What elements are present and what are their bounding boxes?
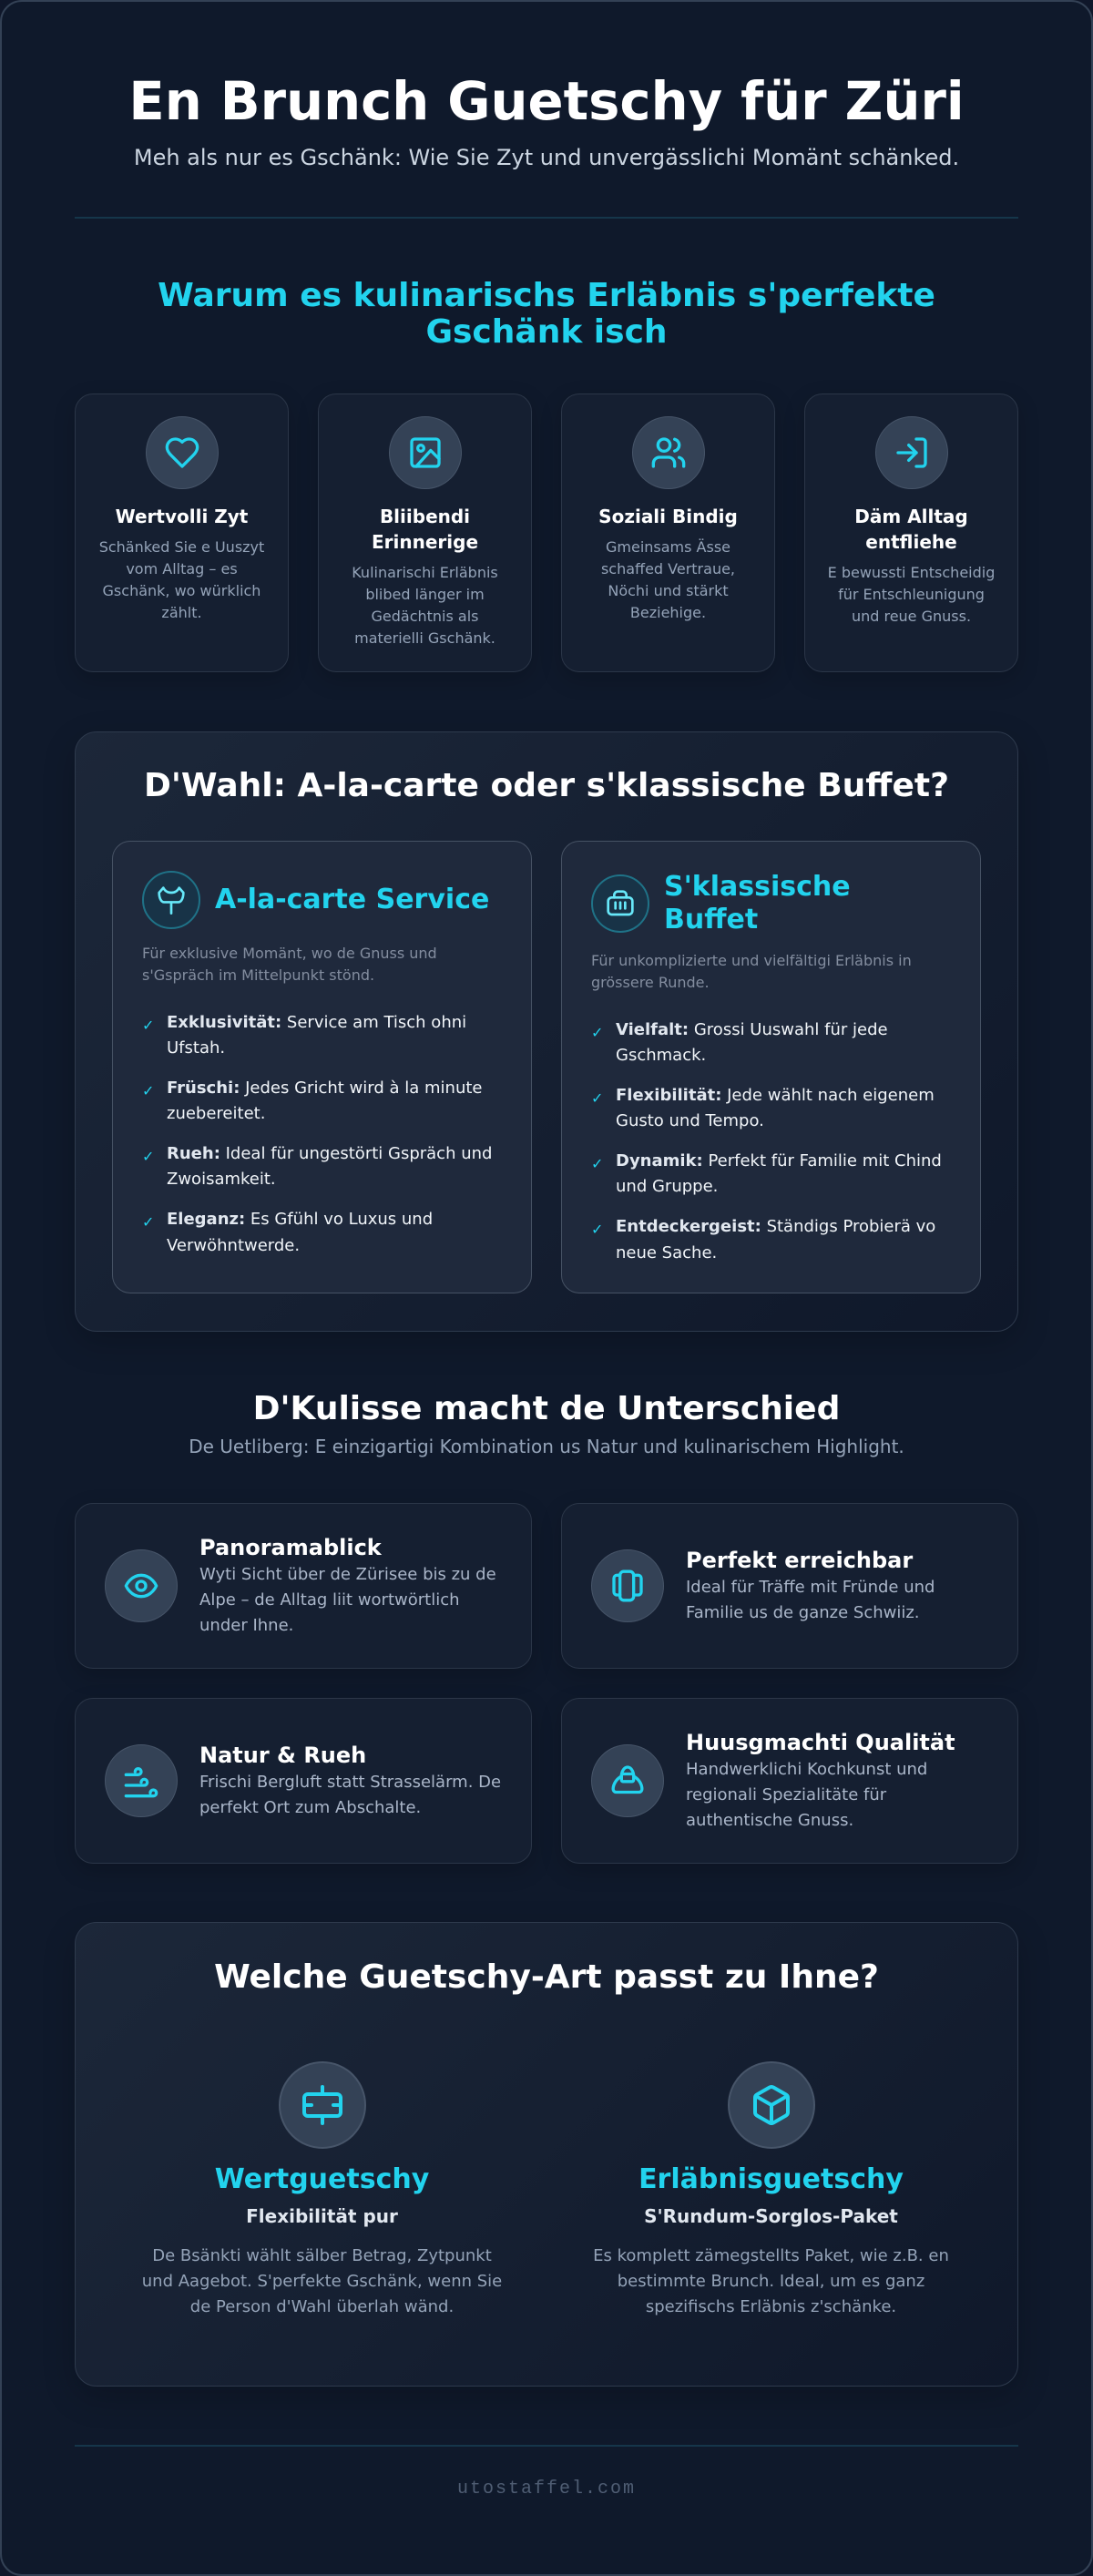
icon: image: [388, 416, 461, 489]
panel: Panoramablick: [75, 1503, 532, 1669]
option benefits list: ✓: [142, 1213, 154, 1231]
card text: E bewussti Entscheidig: [828, 564, 995, 581]
option benefits list: Flexibilität: Jede wählt nach eigenem: [616, 1086, 935, 1105]
heading: choice: D'Wahl: A-la-carte oder s'klassische Buffet?: [144, 767, 949, 804]
card text: vom Alltag – es: [126, 560, 238, 578]
panel: Erläbnisguetschy: [593, 2061, 949, 2316]
voucher text: Es komplett zämegstellts Paket, wie z.B. en: [593, 2246, 949, 2265]
section heading: why: Warum es kulinarischs Erläbnis s'perfekte: [158, 277, 935, 314]
icon: wind: [105, 1744, 178, 1817]
option benefits list: Eleganz: Es Gfühl vo Luxus und: [167, 1210, 433, 1229]
card heading: [372, 506, 478, 553]
option benefits list: Zwoisamkeit.: [167, 1170, 276, 1189]
feature text: Natur & Rueh: [199, 1743, 366, 1768]
feature text: Ideal für Träffe mit Fründe und: [686, 1578, 935, 1597]
option benefits list: ✓: [591, 1024, 603, 1040]
panel: Perfekt erreichbar: [561, 1503, 1018, 1669]
card text: materielli Gschänk.: [354, 629, 495, 647]
option description: [142, 945, 437, 984]
card text: Beziehige.: [630, 604, 706, 621]
option benefits list: neue Sache.: [616, 1243, 717, 1262]
voucher text: De Bsänkti wählt sälber Betrag, Zytpunkt: [152, 2246, 492, 2265]
option header: [591, 871, 851, 935]
voucher tagline: S'Rundum-Sorglos-Paket: [644, 2205, 898, 2227]
feature text: Perfekt erreichbar: [686, 1548, 913, 1573]
card text: Gmeinsams Ässe: [606, 538, 730, 556]
panel: Wertguetschy: [142, 2061, 502, 2316]
icon: log in arrow: [874, 416, 947, 489]
feature text: Wyti Sicht über de Zürisee bis zu de: [199, 1565, 496, 1584]
panel: Wertvolli Zyt: [75, 394, 289, 672]
option benefits list: und Gruppe.: [616, 1177, 718, 1196]
voucher name: Wertguetschy: [215, 2163, 429, 2195]
option description: grössere Runde.: [591, 974, 710, 991]
panel: Soziali Bindig: [561, 394, 775, 672]
option benefits list: zuebereitet.: [167, 1104, 265, 1123]
option benefits list: ✓: [591, 1089, 603, 1107]
option header: [142, 871, 489, 929]
option benefits list: Verwöhntwerde.: [167, 1236, 300, 1255]
voucher text: spezifischs Erläbnis z'schänke.: [646, 2297, 896, 2316]
feature text: authentische Gnuss.: [686, 1811, 853, 1830]
option benefits list: Gusto und Tempo.: [616, 1111, 764, 1130]
card heading: entfliehe: [865, 531, 957, 553]
card text: [601, 538, 735, 621]
card text: Kulinarischi Erläbnis: [352, 564, 498, 581]
panel: A-la-carte Service: [112, 841, 532, 1293]
feature text: [199, 1535, 496, 1635]
option benefits list: Ufstah.: [167, 1038, 225, 1058]
voucher tagline: Flexibilität pur: [246, 2205, 398, 2227]
panel: Däm Alltag entfliehe: [804, 394, 1018, 672]
voucher text: bestimmte Brunch. Ideal, um es ganz: [618, 2272, 924, 2291]
card text: zählt.: [161, 604, 202, 621]
panel: S'klassische Buffet: [561, 841, 981, 1293]
option benefits list: Exklusivität: Service am Tisch ohni: [167, 1013, 466, 1031]
feature text: perfekt Ort zum Abschalte.: [199, 1798, 421, 1817]
icon: box: [727, 2061, 814, 2149]
card text: und reue Gnuss.: [852, 608, 971, 625]
feature text: under Ihne.: [199, 1616, 293, 1635]
card heading: Soziali Bindig: [598, 506, 738, 527]
section heading: why: [158, 277, 935, 351]
voucher text: de Person d'Wahl überlah wänd.: [190, 2297, 454, 2316]
panel: voucher types background: [75, 1922, 1018, 2387]
card heading: Bliibendi: [380, 506, 470, 527]
voucher name: Erläbnisguetschy: [638, 2163, 904, 2195]
icon: a-la-carte: [142, 871, 200, 929]
feature text: [199, 1743, 501, 1817]
voucher text: [593, 2246, 949, 2316]
option heading: Buffet: [664, 904, 758, 935]
panel: Natur & Rueh: [75, 1698, 532, 1864]
feature text: Familie us de ganze Schwiiz.: [686, 1603, 920, 1622]
card text: [352, 564, 498, 647]
card text: Gedächtnis als: [371, 608, 479, 625]
footer: utostaffel.com: [457, 2479, 636, 2499]
icon: buffet: [591, 874, 649, 933]
option heading: A-la-carte Service: [215, 884, 489, 915]
card text: für Entschleunigung: [838, 586, 985, 603]
option benefits list: Rueh: Ideal für ungestörti Gspräch und: [167, 1144, 492, 1163]
option benefits list: ✓: [142, 1148, 154, 1165]
subtitle: Meh als nur es Gschänk: Wie Sie Zyt und unvergässlichi Momänt schänked.: [134, 145, 959, 170]
card heading: Wertvolli Zyt: [116, 506, 248, 527]
feature text: Handwerklichi Kochkunst und: [686, 1760, 927, 1779]
option benefits list: Früschi: Jedes Gricht wird à la minute: [167, 1078, 483, 1098]
icon: eye: [105, 1549, 178, 1622]
icon: users: [632, 416, 705, 489]
option benefits list: Vielfalt: Grossi Uuswahl für jede: [616, 1020, 888, 1038]
option heading: S'klassische: [664, 871, 851, 903]
heading: setting: D'Kulisse macht de Unterschied: [253, 1390, 840, 1427]
option benefits list: [142, 1013, 492, 1255]
card heading: [854, 506, 968, 553]
option description: Für unkomplizierte und vielfältigi Erläbnis in: [591, 952, 912, 969]
panel: choice background: [75, 731, 1018, 1332]
feature text: Huusgmachti Qualität: [686, 1730, 955, 1755]
option description: s'Gspräch im Mittelpunkt stönd.: [142, 966, 374, 984]
option heading: [664, 871, 851, 935]
card heading: Däm Alltag: [854, 506, 968, 527]
icon: connected panels: [591, 1549, 664, 1622]
subheading: setting: De Uetliberg: E einzigartigi Kombination us Natur und kulinarischem Highlight.: [189, 1436, 904, 1457]
option benefits list: [591, 1020, 942, 1262]
option benefits list: ✓: [142, 1017, 154, 1033]
option benefits list: ✓: [591, 1221, 603, 1238]
card text: [99, 538, 264, 621]
icon: bag: [591, 1744, 664, 1817]
feature text: Panoramablick: [199, 1535, 382, 1560]
voucher text: und Aagebot. S'perfekte Gschänk, wenn Sie: [142, 2272, 502, 2291]
feature text: Frischi Bergluft statt Strasselärm. De: [199, 1773, 501, 1792]
title: En Brunch Guetschy für Züri: [128, 71, 965, 132]
heading: voucher types: Welche Guetschy-Art passt zu Ihne?: [214, 1958, 879, 1996]
card text: schaffed Vertraue,: [601, 560, 735, 578]
panel: Huusgmachti Qualität: [561, 1698, 1018, 1864]
card text: Nöchi und stärkt: [608, 582, 729, 599]
icon: value ticket: [279, 2061, 366, 2149]
option description: Für exklusive Momänt, wo de Gnuss und: [142, 945, 437, 962]
voucher text: [142, 2246, 502, 2316]
option benefits list: ✓: [591, 1155, 603, 1172]
option description: [591, 952, 912, 991]
panel: Bliibendi Erinnerige: [318, 394, 532, 672]
feature text: regionali Spezialitäte für: [686, 1785, 886, 1804]
section heading: why: Gschänk isch: [425, 313, 668, 351]
card text: Gschänk, wo würklich: [103, 582, 260, 599]
feature text: [686, 1730, 955, 1830]
icon: heart: [146, 416, 219, 489]
card text: [828, 564, 995, 625]
card heading: Erinnerige: [372, 531, 478, 553]
card text: blibed länger im: [365, 586, 485, 603]
feature text: [686, 1548, 935, 1622]
option benefits list: Dynamik: Perfekt für Familie mit Chind: [616, 1151, 942, 1170]
card text: Schänked Sie e Uuszyt: [99, 538, 264, 556]
option benefits list: ✓: [142, 1082, 154, 1099]
option benefits list: Entdeckergeist: Ständigs Probierä vo: [616, 1217, 935, 1236]
option benefits list: Gschmack.: [616, 1046, 706, 1065]
feature text: Alpe – de Alltag liit wortwörtlich: [199, 1590, 460, 1610]
